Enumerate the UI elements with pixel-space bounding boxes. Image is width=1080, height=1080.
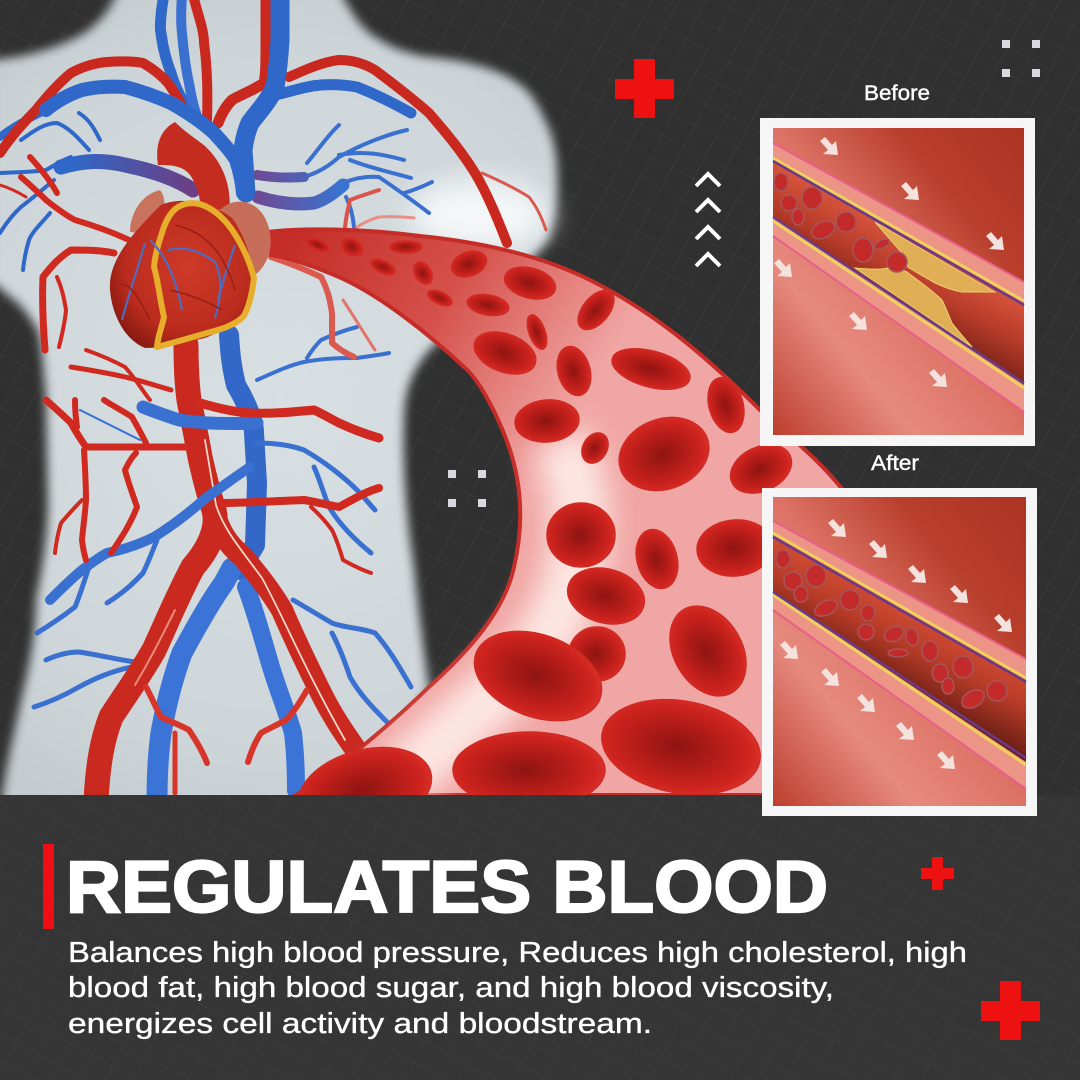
pale inner light of vessel (400, 440, 580, 780)
title: REGULATES BLOOD (66, 847, 828, 928)
neck vessels (193, 0, 207, 120)
lower blue veins (229, 335, 257, 570)
red upper-body branches (0, 157, 414, 573)
icon: dots center (448, 470, 486, 507)
right red arc (289, 60, 507, 243)
panel: before artery (760, 118, 1035, 446)
artery wall (773, 521, 1026, 789)
description text (68, 937, 967, 1040)
illustration: circulatory system on torso (0, 0, 850, 846)
left blue branches (0, 110, 100, 270)
description text: Balances high blood pressure, Reduces high cholesterol, high (68, 937, 967, 969)
accent bar (43, 844, 54, 929)
icon: large red cross bottom (981, 981, 1040, 1040)
label: after: After (871, 452, 919, 475)
label: before: Before (864, 82, 930, 105)
lower red twigs (146, 687, 307, 793)
vessel connecting to heart (268, 229, 850, 795)
icon: small red cross (921, 857, 954, 890)
aortic arch (157, 122, 230, 212)
arrows (774, 137, 1004, 387)
lower band background (0, 795, 1080, 1080)
torso silhouette (0, 0, 557, 810)
icon: dots top right (1002, 40, 1040, 77)
red blood cells (289, 235, 799, 846)
blue arcs (46, 87, 243, 193)
heart (110, 190, 271, 348)
soft highlight near vessel (410, 180, 550, 250)
cells (776, 550, 1007, 712)
veins and arteries (0, 0, 546, 800)
blue branch crossing aorta (50, 467, 250, 600)
artery lumen (773, 160, 1024, 385)
right blue branches (257, 125, 432, 380)
panel: after artery (762, 488, 1037, 816)
cells (774, 173, 907, 272)
icon: large red cross top (615, 59, 674, 118)
description text: blood fat, high blood sugar, and high blood viscosity, (68, 972, 834, 1004)
artery wall (773, 143, 1024, 412)
arrows (780, 519, 1012, 769)
descending aorta and iliac arteries (96, 345, 215, 800)
icon: upward chevrons (696, 174, 720, 266)
artery lumen (773, 535, 1026, 762)
left red arc (0, 61, 186, 153)
plaque (875, 222, 995, 292)
description text: energizes cell activity and bloodstream. (68, 1008, 652, 1040)
plaque lower (855, 268, 972, 347)
